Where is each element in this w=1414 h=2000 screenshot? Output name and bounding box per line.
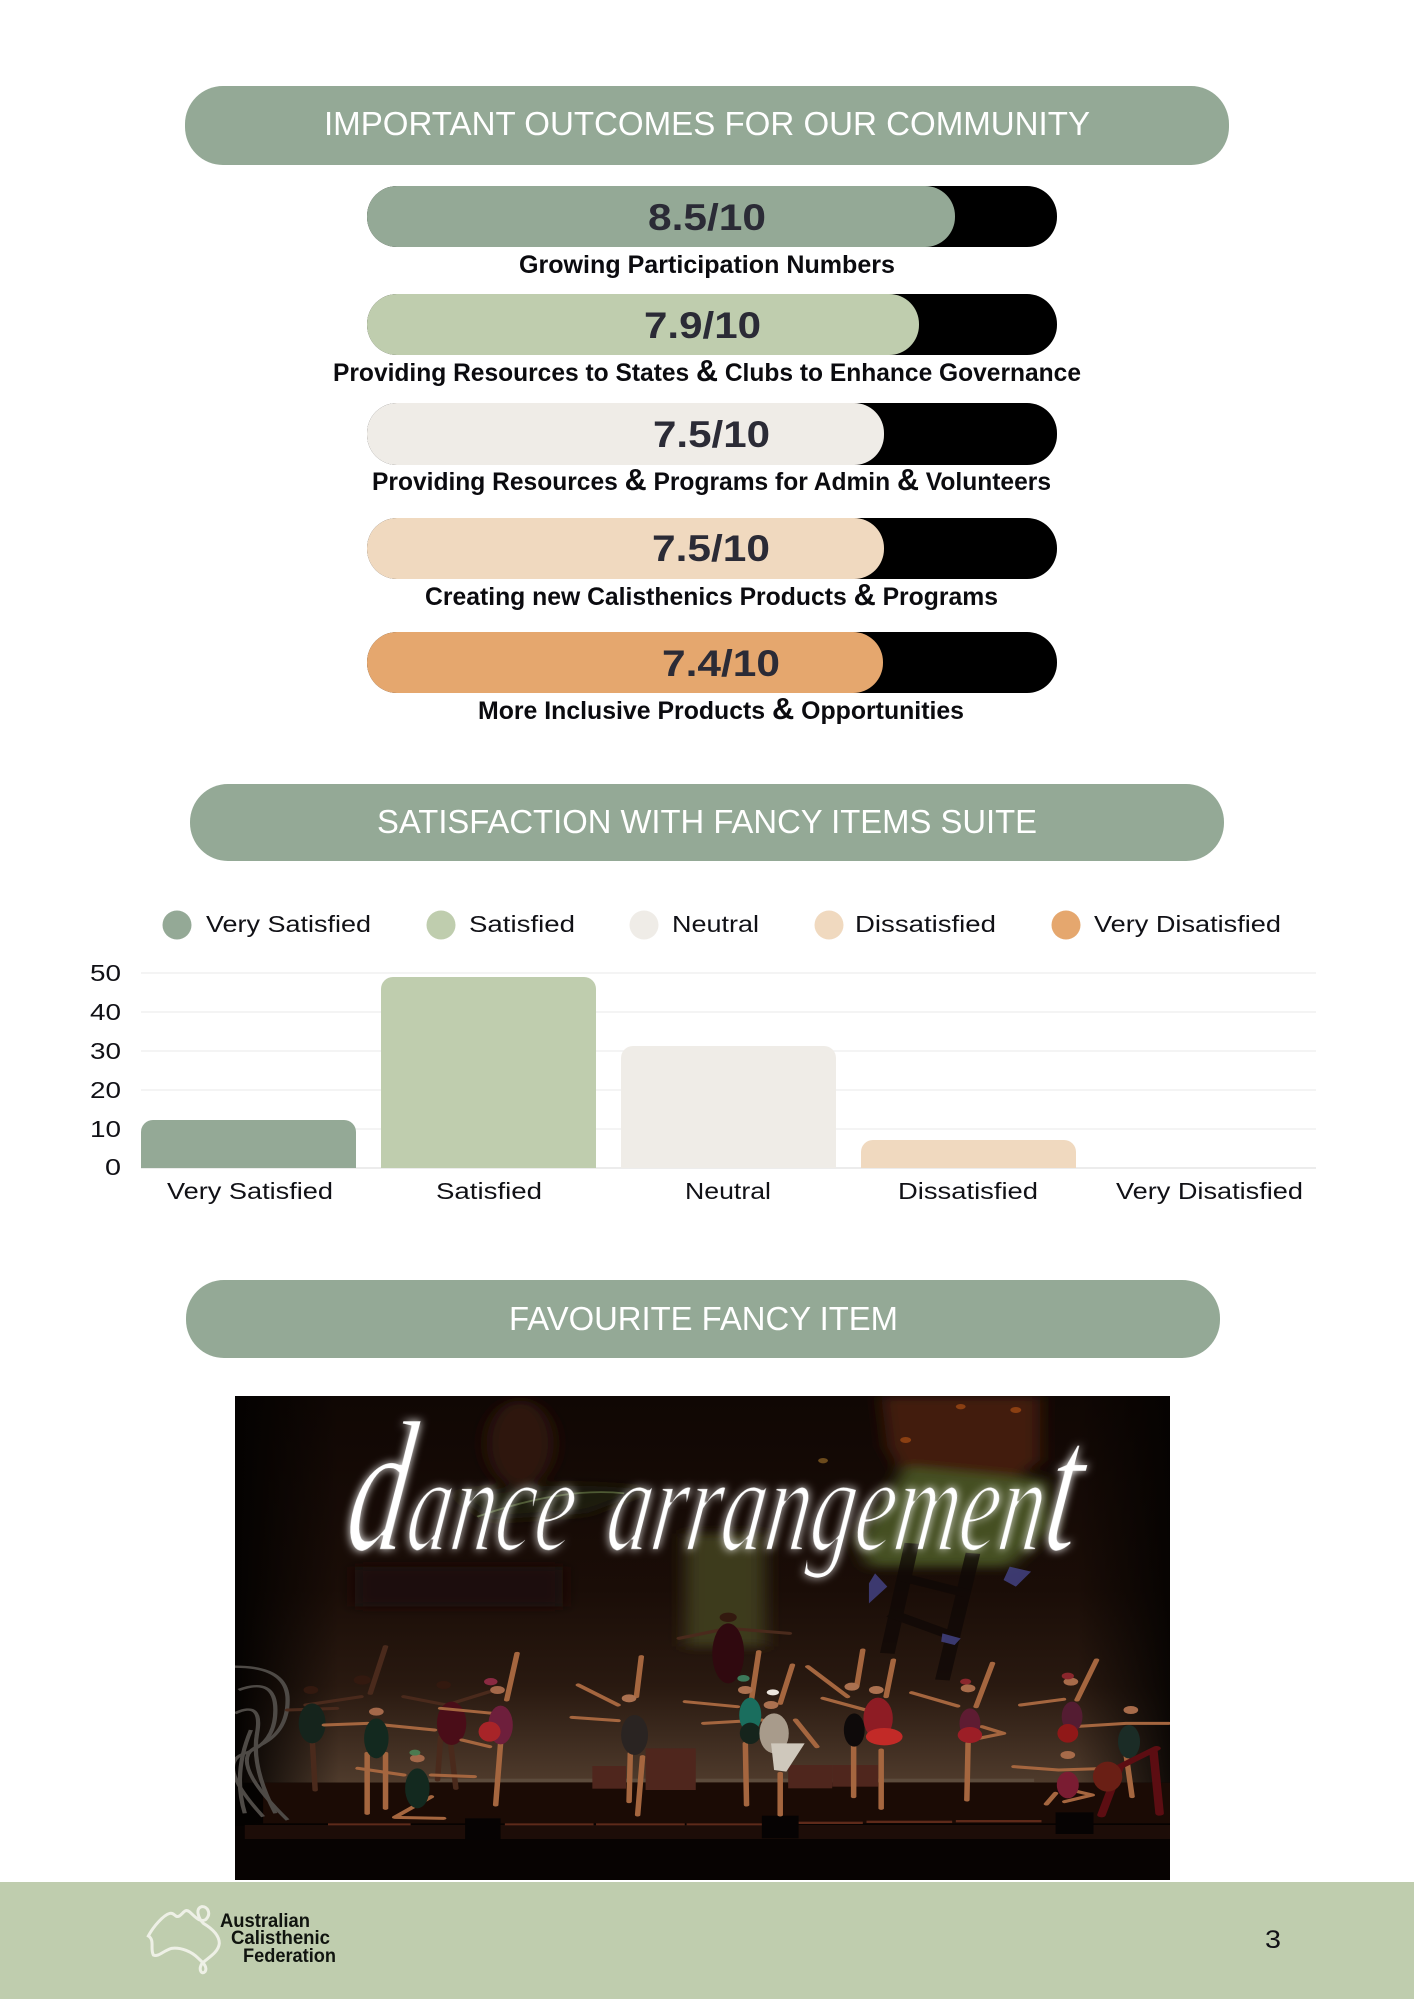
photo: dance arrangement stage scene <box>233 1384 1170 1880</box>
y axis labels <box>90 960 121 1180</box>
logo: australian calisthenic federation <box>148 1907 336 1973</box>
icon: australia outline <box>148 1907 219 1973</box>
y axis labels: 0 <box>105 1154 121 1180</box>
rating bar: inclusive products <box>367 632 1057 726</box>
rating bar: growing participation <box>367 186 1057 279</box>
x axis labels: Satisfied <box>436 1178 542 1204</box>
legend: Satisfied <box>469 911 575 937</box>
heading: satisfaction with fancy items: SATISFACTION WITH FANCY ITEMS SUITE <box>377 803 1037 840</box>
legend: Neutral <box>672 911 759 937</box>
neon title on photo <box>336 1384 1100 1591</box>
x axis labels <box>167 1178 1303 1204</box>
dancers: centre group <box>572 1650 903 1815</box>
y axis labels: 20 <box>90 1077 121 1103</box>
page number: 3 <box>1265 1926 1281 1954</box>
heading: important outcomes: IMPORTANT OUTCOMES FOR OUR COMMUNITY <box>324 105 1090 142</box>
backdrop swoosh <box>477 1492 624 1517</box>
rating bar: inclusive products: 7.4/10 <box>662 643 780 684</box>
heading: important outcomes <box>185 86 1229 165</box>
legend: Very Disatisfied <box>1094 911 1281 937</box>
y axis labels: 50 <box>90 960 121 986</box>
logo wordmark <box>220 1910 336 1967</box>
fire highlights on backdrop <box>818 1404 1021 1463</box>
logo wordmark: Australian <box>220 1910 310 1932</box>
y axis labels: 40 <box>90 999 121 1025</box>
rating bar: new products and programs: Creating new Calisthenics Products & Programs <box>425 577 998 612</box>
legend <box>162 910 1281 940</box>
rating bar: resources for admin and volunteers: 7.5/10 <box>653 414 770 455</box>
panel: outcome ratings <box>333 186 1081 726</box>
y axis labels: 10 <box>90 1116 121 1142</box>
rating bar: resources to states and clubs <box>333 294 1081 388</box>
x axis labels: Dissatisfied <box>898 1178 1038 1204</box>
decorative tree <box>233 1667 288 1820</box>
rating bar: new products and programs <box>367 518 1057 612</box>
heading: favourite fancy item: FAVOURITE FANCY ITEM <box>509 1300 898 1337</box>
bar: very satisfied <box>141 1120 356 1168</box>
rating bar: resources for admin and volunteers: Providing Resources & Programs for Admin & Volunteers <box>372 462 1051 497</box>
side vignettes <box>235 1396 339 1826</box>
stage floor <box>263 1783 1170 1823</box>
set bricks <box>592 1748 878 1790</box>
heading: satisfaction with fancy items <box>190 784 1224 861</box>
backdrop blue patches <box>869 1567 1031 1645</box>
x axis labels: Very Satisfied <box>167 1178 333 1204</box>
dancers: back row <box>288 1613 789 1790</box>
footer band <box>0 1882 1414 1999</box>
bar chart: satisfaction <box>90 960 1316 1204</box>
stage monitors <box>465 1812 1094 1840</box>
legend: Very Satisfied <box>206 911 371 937</box>
neon title on photo: dance <box>336 1384 594 1591</box>
legend: Dissatisfied <box>855 911 996 937</box>
rating bar: growing participation: Growing Participation Numbers <box>519 251 895 279</box>
bar: dissatisfied <box>861 1140 1076 1168</box>
dancers: right group <box>912 1660 1169 1815</box>
y axis labels: 30 <box>90 1038 121 1064</box>
right vignette <box>1077 1396 1170 1826</box>
bar: satisfied <box>381 977 596 1168</box>
rating bar: growing participation: 8.5/10 <box>648 197 766 238</box>
neon title on photo: arrangement <box>597 1384 1100 1591</box>
rating bar: resources to states and clubs: Providing Resources to States & Clubs to Enhance Governance <box>333 353 1081 388</box>
x axis labels: Very Disatisfied <box>1116 1178 1303 1204</box>
rating bar: inclusive products: More Inclusive Products & Opportunities <box>478 691 964 726</box>
rating bar: new products and programs: 7.5/10 <box>652 528 770 569</box>
logo wordmark: Calisthenic <box>231 1927 330 1949</box>
rating bar: resources for admin and volunteers <box>367 403 1057 497</box>
bar: neutral <box>621 1046 836 1168</box>
logo wordmark: Federation <box>243 1945 336 1967</box>
rating bar: resources to states and clubs: 7.9/10 <box>644 305 761 346</box>
x axis labels: Neutral <box>685 1178 771 1204</box>
ladder on backdrop <box>887 1543 973 1680</box>
stage edge lights <box>245 1825 1170 1839</box>
dancers: left group <box>324 1653 517 1818</box>
heading: favourite fancy item <box>186 1280 1220 1358</box>
